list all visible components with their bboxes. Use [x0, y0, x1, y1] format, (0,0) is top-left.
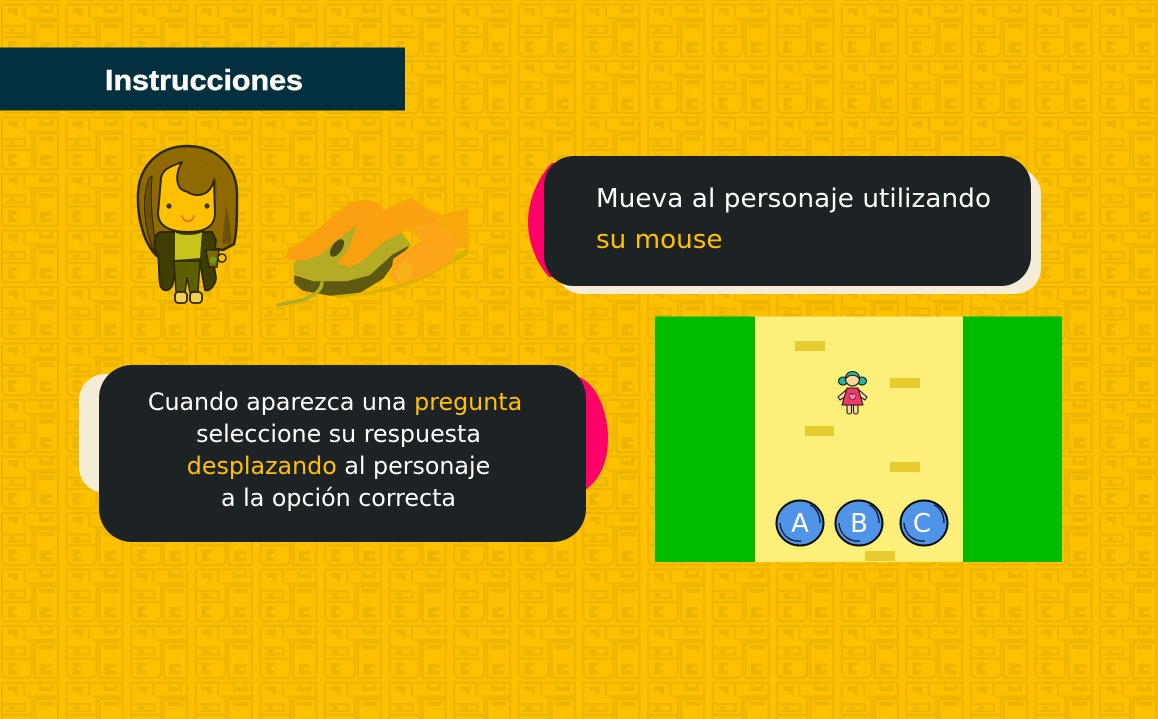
cream backing — [556, 168, 1041, 294]
pink accent — [528, 163, 600, 277]
answer option A: A — [791, 509, 809, 539]
panel: question instruction — [79, 365, 608, 542]
question instruction text: seleccione su respuesta — [196, 420, 481, 448]
cream backing — [79, 374, 319, 493]
panel: mouse instruction — [528, 156, 1041, 294]
dark bubble — [99, 365, 586, 542]
question instruction text: a la opción correcta — [221, 484, 456, 512]
answer option C — [900, 500, 948, 546]
dark bubble — [544, 156, 1031, 286]
icon: girl player — [838, 372, 867, 414]
answer option B: B — [850, 509, 868, 539]
road markings — [795, 341, 920, 561]
question instruction text: desplazando al personaje — [187, 452, 490, 480]
title banner — [0, 48, 405, 110]
answer option C: C — [913, 509, 931, 539]
answer option B — [836, 500, 882, 546]
title: Instrucciones — [105, 65, 303, 97]
pink accent — [560, 375, 608, 491]
game illustration — [655, 316, 1062, 562]
icon: hand on mouse — [278, 198, 468, 305]
icon: girl character — [138, 146, 237, 303]
answer option A — [776, 500, 824, 546]
question instruction text: Cuando aparezca una pregunta — [148, 388, 522, 416]
mouse instruction text: Mueva al personaje utilizando — [596, 184, 991, 214]
mouse instruction text: su mouse — [596, 225, 722, 255]
